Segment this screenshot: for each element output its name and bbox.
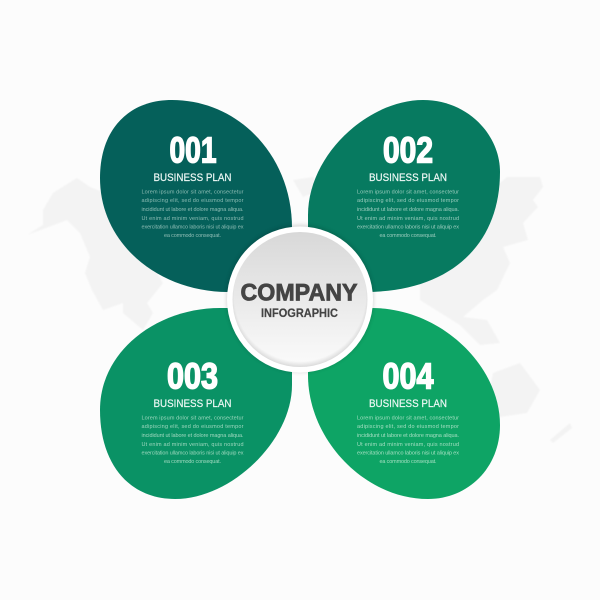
panel 003 <box>100 308 292 499</box>
body text 004: incididunt ut labore et dolore magna aliqua. <box>357 433 459 439</box>
panel 001 <box>100 100 292 292</box>
body text 003: Ut enim ad minim veniam, quis nostrud <box>142 442 244 448</box>
petal 002 <box>308 100 500 292</box>
centre badge <box>226 225 374 372</box>
body text 004: exercitation ullamco laboris nisi ut aliquip ex <box>357 450 459 456</box>
background world map <box>27 177 572 443</box>
body text 003: exercitation ullamco laboris nisi ut aliquip ex <box>142 450 244 456</box>
petal 004 <box>308 308 500 499</box>
body text 002 <box>357 190 459 239</box>
heading 003: BUSINESS PLAN <box>154 398 232 410</box>
body text 001: Ut enim ad minim veniam, quis nostrud <box>142 216 244 222</box>
body text 003: incididunt ut labore et dolore magna aliqua. <box>142 433 244 439</box>
company title: COMPANY <box>240 280 358 306</box>
body text 001: incididunt ut labore et dolore magna aliqua. <box>142 207 244 213</box>
number 002: 002 <box>383 130 433 170</box>
body text 001: adipiscing elit, sed do eiusmod tempor <box>142 198 244 204</box>
body text 002: exercitation ullamco laboris nisi ut aliquip ex <box>357 224 459 230</box>
body text 004: ea commodo consequat. <box>380 459 437 465</box>
body text 003 <box>142 416 244 465</box>
number 003: 003 <box>167 356 218 396</box>
heading 002: BUSINESS PLAN <box>369 172 447 184</box>
number 004: 004 <box>382 356 434 396</box>
body text 001: ea commodo consequat. <box>164 233 221 239</box>
body text 003: ea commodo consequat. <box>164 459 221 465</box>
panel 002 <box>308 100 500 292</box>
petal 001 <box>100 100 292 292</box>
body text 002: adipiscing elit, sed do eiusmod tempor <box>357 198 459 204</box>
body text 003: Lorem ipsum dolor sit amet, consectetur <box>142 416 244 422</box>
body text 004 <box>357 416 459 465</box>
body text 004: adipiscing elit, sed do eiusmod tempor <box>357 424 459 430</box>
heading 004: BUSINESS PLAN <box>369 398 447 410</box>
panel 004 <box>308 308 500 499</box>
infographic subtitle: INFOGRAPHIC <box>261 306 338 320</box>
body text 004: Lorem ipsum dolor sit amet, consectetur <box>357 416 459 422</box>
body text 004: Ut enim ad minim veniam, quis nostrud <box>357 442 459 448</box>
body text 002: Lorem ipsum dolor sit amet, consectetur <box>357 190 459 196</box>
body text 002: incididunt ut labore et dolore magna aliqua. <box>357 207 459 213</box>
body text 001: exercitation ullamco laboris nisi ut aliquip ex <box>142 224 244 230</box>
body text 001: Lorem ipsum dolor sit amet, consectetur <box>142 190 244 196</box>
body text 002: ea commodo consequat. <box>380 233 437 239</box>
body text 002: Ut enim ad minim veniam, quis nostrud <box>357 216 459 222</box>
number 001: 001 <box>170 130 216 170</box>
body text 001 <box>142 190 244 239</box>
petal 003 <box>100 308 292 499</box>
heading 001: BUSINESS PLAN <box>154 172 232 184</box>
body text 003: adipiscing elit, sed do eiusmod tempor <box>142 424 244 430</box>
